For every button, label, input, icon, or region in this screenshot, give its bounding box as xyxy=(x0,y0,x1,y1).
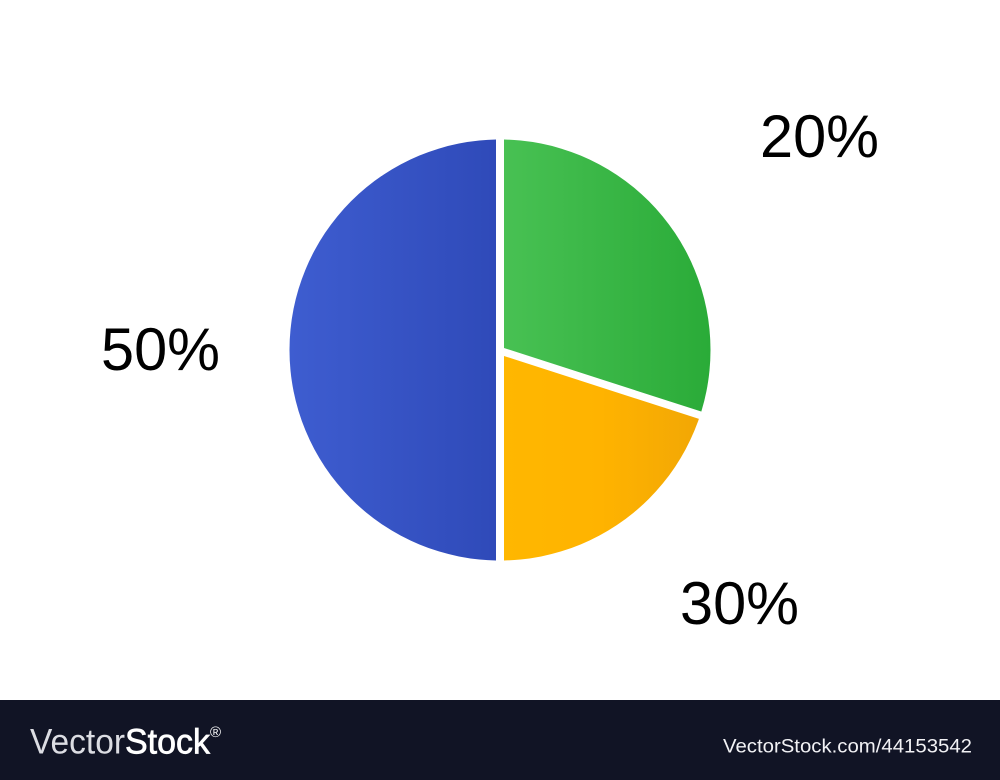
footer image id: VectorStock.com/44153542 xyxy=(723,736,972,758)
footer logo: Stock xyxy=(125,722,210,762)
label: 50%: 50% xyxy=(101,316,220,383)
label: 30%: 30% xyxy=(680,570,799,637)
label: 20%: 20% xyxy=(760,103,879,170)
pie chart xyxy=(290,140,710,560)
slice: blue 50% xyxy=(290,140,496,560)
footer bar xyxy=(0,700,1000,780)
footer logo: Vector xyxy=(30,722,125,762)
slice: orange xyxy=(504,356,699,560)
slice: green xyxy=(504,140,710,412)
footer logo xyxy=(30,722,221,762)
footer logo: ® xyxy=(210,724,221,741)
